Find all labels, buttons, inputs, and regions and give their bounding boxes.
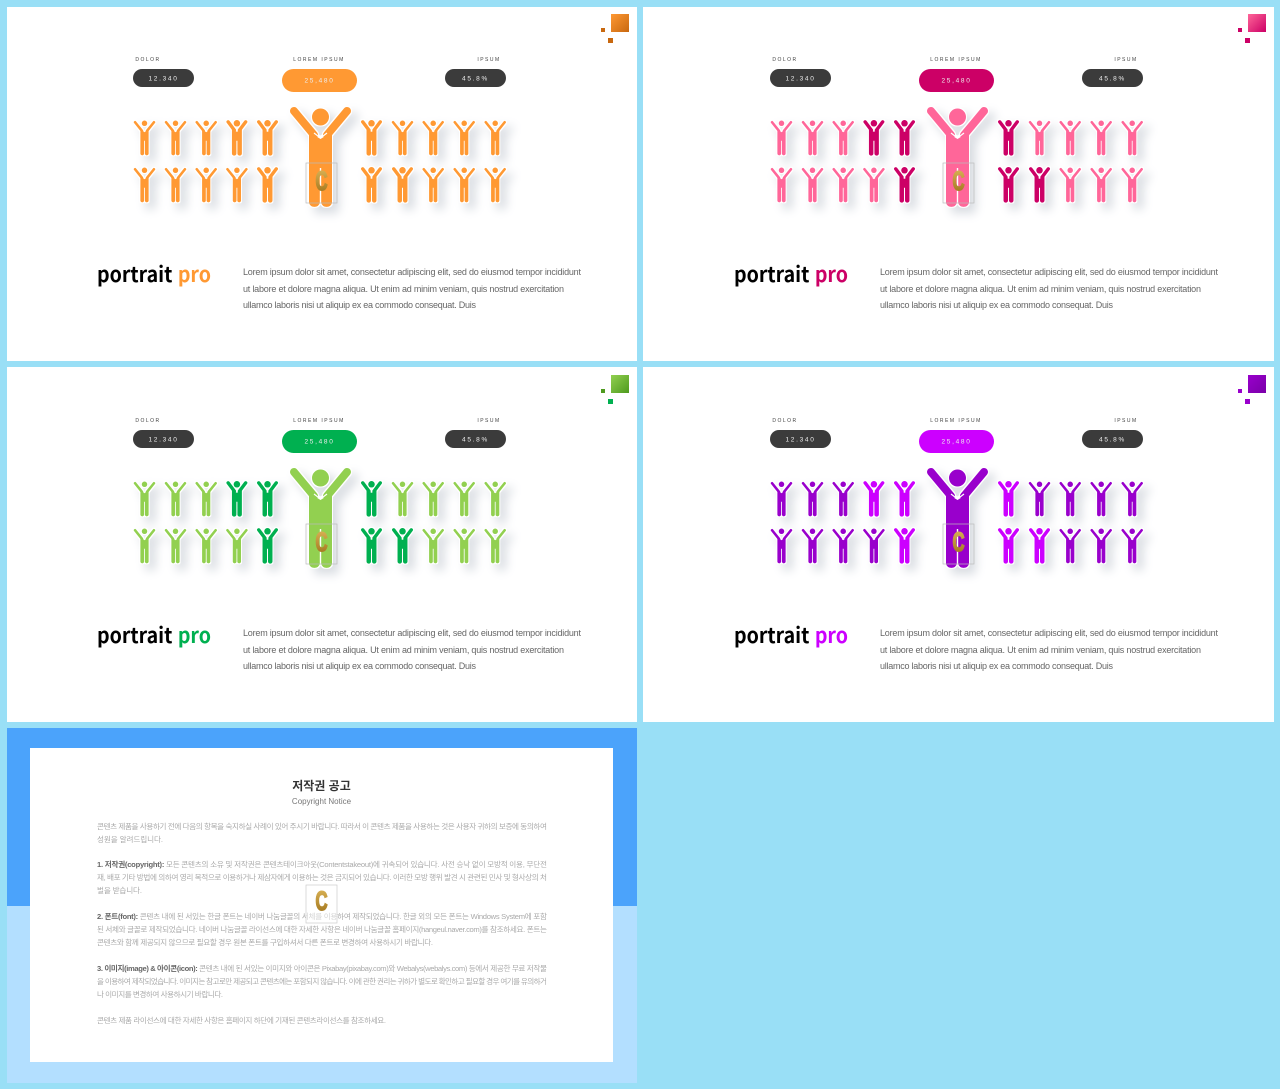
stat: ipsum: IPSUM [1114,418,1138,424]
pictogram people [772,470,1142,568]
heading: portrait pro [97,259,211,289]
section 2 font: 콘텐츠와 함께 제공되지 않으므로 필요할 경우 원본 폰트를 구입하셔서 다른 폰트로 변경하여 사용하시기 바랍니다. [97,937,433,947]
description: ut labore et dolore magna aliqua. Ut enim ad minim veniam, quis nostrud exercitation [243,284,564,294]
panel: pink portrait pro [643,7,1274,361]
stat: dolor [133,418,194,448]
corner squares icon [1238,375,1266,404]
pictogram people [772,108,1142,207]
heading: portrait pro [734,620,848,650]
section 3 image and icon [97,963,547,999]
stat: ipsum [445,57,506,87]
corner squares icon [601,14,629,43]
section 2 font: 된 서체와 글꼴로 제작되었습니다. 네이버 나눔글꼴 라이선스에 대한 자세한 사항은 네이버 나눔글꼴 홈페이지(hangeul.naver.com)를 참조하세요. 폰트는 [97,924,547,934]
intro text [97,821,547,844]
stat: lorem ipsum: LOREM IPSUM [930,418,982,424]
description: ut labore et dolore magna aliqua. Ut enim ad minim veniam, quis nostrud exercitation [880,284,1201,294]
watermark logo: C [315,527,328,557]
stat: ipsum: 45.8% [462,436,489,443]
stat: lorem ipsum [919,57,994,92]
license note: 콘텐츠 제품 라이선스에 대한 자세한 사항은 홈페이지 하단에 기재된 콘텐츠라이선스를 참조하세요. [97,1015,386,1025]
description: ullamco laboris nisi ut aliquip ex ea commodo consequat. Duis [880,661,1114,671]
stat: ipsum: 45.8% [1099,436,1126,443]
stat: lorem ipsum [282,57,357,92]
stat: ipsum: IPSUM [1114,57,1138,63]
stat: lorem ipsum: 25,480 [304,438,335,446]
watermark logo [943,163,974,203]
intro text: 성원을 알려드립니다. [97,834,163,844]
panel: green portrait pro [7,367,637,722]
stat: lorem ipsum: LOREM IPSUM [293,57,345,63]
watermark logo: C [952,166,965,196]
stat: ipsum: 45.8% [1099,75,1126,82]
stat: dolor [133,57,194,87]
intro text: 콘텐츠 제품을 사용하기 전에 다음의 항목을 숙지하실 사례이 있어 주시기 바랍니다. 따라서 이 콘텐츠 제품을 사용하는 것은 사용자 귀하의 보증에 동의하여 [97,821,547,831]
corner squares icon [601,375,629,404]
stat: dolor: DOLOR [772,57,798,63]
description: ut labore et dolore magna aliqua. Ut enim ad minim veniam, quis nostrud exercitation [243,645,564,655]
description: Lorem ipsum dolor sit amet, consectetur adipiscing elit, sed do eiusmod tempor incididunt [243,267,581,277]
corner squares icon [1238,14,1266,43]
stat: lorem ipsum [282,418,357,453]
stat: dolor: 12.340 [148,75,179,82]
stat: ipsum [1082,418,1143,448]
stat: ipsum: IPSUM [477,57,501,63]
notice title: 저작권 공고 [292,778,351,793]
section 1 copyright [97,859,547,895]
stat: dolor: DOLOR [772,418,798,424]
watermark logo [306,524,337,564]
description: ullamco laboris nisi ut aliquip ex ea commodo consequat. Duis [243,300,476,310]
panel: purple portrait pro [643,367,1274,722]
watermark logo: C [315,886,328,916]
stat: dolor [770,57,831,87]
stat: lorem ipsum: 25,480 [304,78,335,84]
notice subtitle: Copyright Notice [292,797,352,806]
section 2 font: 2. 폰트(font): 콘텐츠 내에 된 서있는 한글 폰트는 네이버 나눔글꼴의 서체를 이용하여 제작되었습니다. 한글 외의 모든 폰트는 Windows System에 포함 [97,911,547,921]
description: Lorem ipsum dolor sit amet, consectetur adipiscing elit, sed do eiusmod tempor incididunt [880,267,1218,277]
watermark logo [306,163,337,203]
description [880,628,1218,671]
stat: dolor: 12.340 [148,436,179,443]
stat: ipsum [1082,57,1143,87]
section 1 copyright: 벌을 받습니다. [97,885,142,895]
section 3 image and icon: 나 이미지를 변경하여 사용하시기 바랍니다. [97,989,223,999]
section 3 image and icon: 을 이용하여 제작되었습니다. 이미지는 참고로만 제공되고 콘텐츠에는 포함되지 않습니다. 이에 관한 권리는 귀하가 별도로 확인하고 필요할 경우 여기를 유의하거 [97,976,547,986]
watermark logo [943,524,974,564]
stat: ipsum [445,418,506,448]
watermark logo [306,885,337,923]
stat: lorem ipsum: 25,480 [941,438,972,446]
stat: dolor: 12.340 [785,75,816,82]
stat: lorem ipsum: LOREM IPSUM [930,57,982,63]
stat: dolor: 12.340 [785,436,816,443]
description: ullamco laboris nisi ut aliquip ex ea commodo consequat. Duis [243,661,476,671]
stat: lorem ipsum: LOREM IPSUM [293,418,345,424]
stat: lorem ipsum: 25,480 [941,78,972,84]
stat: ipsum: 45.8% [462,75,489,82]
description [243,628,581,671]
stat: dolor [770,418,831,448]
panel: orange portrait pro [7,7,637,361]
description: Lorem ipsum dolor sit amet, consectetur adipiscing elit, sed do eiusmod tempor incididunt [880,628,1218,638]
stat: ipsum: IPSUM [477,418,501,424]
description: Lorem ipsum dolor sit amet, consectetur adipiscing elit, sed do eiusmod tempor incididunt [243,628,581,638]
description [880,267,1218,310]
description [243,267,581,310]
section 1 copyright: 1. 저작권(copyright): 모든 콘텐츠의 소유 및 저작권은 콘텐츠테이크아웃(Contentstakeout)에 귀속되어 있습니다. 사전 승낙 없이 모방적 이용, 무단전 [97,859,547,869]
description: ullamco laboris nisi ut aliquip ex ea commodo consequat. Duis [880,300,1114,310]
pictogram people [135,108,505,207]
section 1 copyright: 재, 배포 기타 방법에 의하여 영리 목적으로 이용하거나 제삼자에게 이용하는 것은 금지되어 있습니다. 이러한 모방 행위 발견 시 관련된 민사 및 형사상의 처 [97,872,547,882]
section 2 font [97,911,547,947]
section 3 image and icon: 3. 이미지(image) & 아이콘(icon): 콘텐츠 내에 된 서있는 이미지와 아이콘은 Pixabay(pixabay.com)와 Webalys(webalys.com) 등에서 제공한 무료 저작물 [97,963,547,973]
stat: dolor: DOLOR [135,57,161,63]
panel: copyright notice [7,728,637,1083]
description: ut labore et dolore magna aliqua. Ut enim ad minim veniam, quis nostrud exercitation [880,645,1201,655]
watermark logo: C [952,527,965,557]
heading: portrait pro [97,620,211,650]
heading: portrait pro [734,259,848,289]
watermark logo: C [315,166,328,196]
stat: lorem ipsum [919,418,994,453]
stat: dolor: DOLOR [135,418,161,424]
pictogram people [135,470,505,568]
